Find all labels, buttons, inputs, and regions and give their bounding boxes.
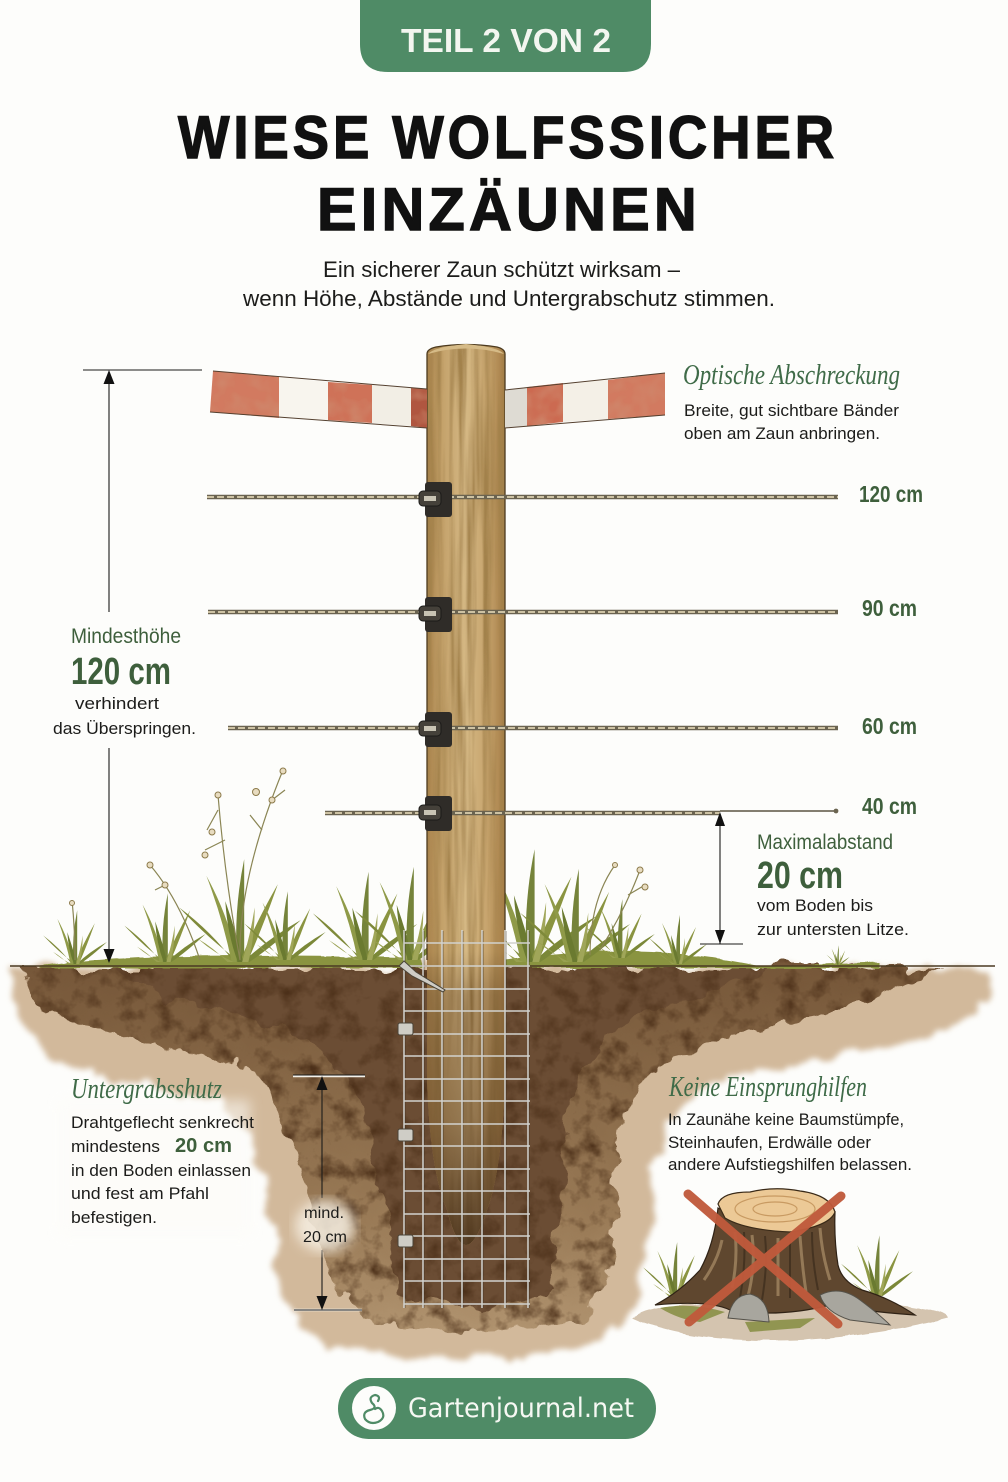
- wire height labels: 40 cm: [862, 793, 917, 819]
- text block: optical deterrent: [683, 360, 900, 443]
- dimension arrow: depth: [293, 1075, 365, 1310]
- wire 120 cm: [207, 482, 838, 517]
- text block: maximum gap: zur untersten Litze.: [757, 920, 909, 939]
- insulator: [419, 482, 452, 517]
- insulator: [419, 712, 452, 747]
- text block: minimum height: das Überspringen.: [53, 719, 196, 738]
- text block: no jump aids: Steinhaufen, Erdwälle oder: [668, 1133, 871, 1152]
- ground patch: [632, 1305, 948, 1341]
- warning ribbon left: [210, 371, 427, 428]
- title: [178, 105, 838, 243]
- depth label: 20 cm: [303, 1229, 347, 1246]
- soil: dark top and post pit: [110, 968, 770, 1305]
- text block: dig protection: Drahtgeflecht senkrecht: [71, 1113, 254, 1132]
- footer brand pill: Gartenjournal.net: [408, 1393, 634, 1424]
- text block: minimum height: [53, 625, 196, 738]
- subtitle: [242, 257, 775, 311]
- text block: dig protection: Untergrabsshutz: [71, 1074, 222, 1105]
- text block: optical deterrent: oben am Zaun anbringen.: [684, 424, 880, 443]
- flower heads: [70, 768, 648, 906]
- wire mesh underground protection: [398, 930, 530, 1308]
- text block: dig protection: in den Boden einlassen: [71, 1161, 251, 1180]
- text block: dig protection: und fest am Pfahl: [71, 1184, 209, 1203]
- text block: dig protection: mindestens: [71, 1137, 160, 1156]
- text block: no jump aids: [668, 1072, 912, 1174]
- text block: maximum gap: 20 cm: [757, 855, 843, 897]
- moss strip: [40, 951, 880, 968]
- text block: optical deterrent: Optische Abschreckung: [683, 360, 900, 391]
- top fence height label lines: [83, 370, 202, 963]
- text block: maximum gap: Maximalabstand: [757, 831, 893, 854]
- wire height labels: 90 cm: [862, 595, 917, 621]
- wire height labels: [859, 481, 923, 819]
- rocks: [728, 1291, 890, 1325]
- text block: dig protection: 20 cm: [175, 1135, 232, 1157]
- tree rings: [735, 1196, 815, 1222]
- warning ribbon right: [505, 373, 665, 428]
- stump body: [655, 1208, 915, 1315]
- dimension arrow: ground to lowest wire: [700, 812, 743, 944]
- text block: no jump aids: In Zaunähe keine Baumstümpfe,: [668, 1110, 904, 1129]
- wire height labels: 60 cm: [862, 713, 917, 739]
- halo: [295, 1200, 355, 1252]
- moss: [660, 1306, 815, 1332]
- text block: maximum gap: [757, 831, 909, 939]
- soil: mid-brown layer: [24, 968, 940, 1331]
- footer brand pill: [338, 1378, 656, 1439]
- text block: no jump aids: Keine Einsprunghilfen: [668, 1072, 867, 1103]
- subtitle: Ein sicherer Zaun schützt wirksam –: [323, 257, 681, 282]
- wire 90 cm: [208, 597, 838, 632]
- stump bark dark furrows: [740, 1232, 818, 1300]
- text block: maximum gap: vom Boden bis: [757, 896, 873, 915]
- stump with red cross: [632, 1189, 948, 1341]
- side grass: [643, 1242, 707, 1296]
- post: outline: [427, 344, 505, 960]
- icon: sprout logo: [352, 1386, 396, 1430]
- text block: no jump aids: andere Aufstiegshilfen belassen.: [668, 1155, 912, 1174]
- wire 60 cm: [228, 712, 838, 747]
- depth label: [295, 1200, 355, 1252]
- grass and flowers: [10, 768, 995, 968]
- title: EINZÄUNEN: [317, 177, 701, 243]
- soil: light outer wash: [14, 968, 992, 1359]
- flower stems: [72, 770, 645, 960]
- text block: minimum height: Mindesthöhe: [71, 625, 181, 648]
- grass tufts: [43, 910, 107, 964]
- post: cut top: [428, 344, 504, 354]
- red cross: [688, 1194, 841, 1324]
- wire 40 cm: [325, 796, 838, 831]
- post: underground shading: [427, 354, 505, 1245]
- wooden post: [427, 344, 505, 1245]
- insulator: [419, 796, 452, 831]
- text block: minimum height: verhindert: [75, 694, 159, 713]
- badge: part 2 of 2: [360, 0, 651, 72]
- stump bark highlights: [704, 1228, 830, 1296]
- insulator: [419, 597, 452, 632]
- badge: part 2 of 2: TEIL 2 VON 2: [401, 22, 611, 59]
- soil cross-section: [14, 968, 992, 1359]
- ground line: [10, 965, 995, 967]
- text block: dig protection: [60, 1074, 254, 1235]
- title: WIESE WOLFSSICHER: [178, 105, 838, 171]
- text block: minimum height: 120 cm: [71, 651, 171, 693]
- text block: dig protection: befestigen.: [71, 1208, 157, 1227]
- depth label: mind.: [304, 1205, 344, 1222]
- stump cut surface: [718, 1189, 835, 1232]
- halo: [60, 1100, 250, 1235]
- subtitle: wenn Höhe, Abstände und Untergrabschutz stimmen.: [242, 286, 775, 311]
- wire height labels: 120 cm: [859, 481, 923, 507]
- text block: optical deterrent: Breite, gut sichtbare Bänder: [684, 401, 899, 420]
- mesh fasteners: [398, 961, 445, 1247]
